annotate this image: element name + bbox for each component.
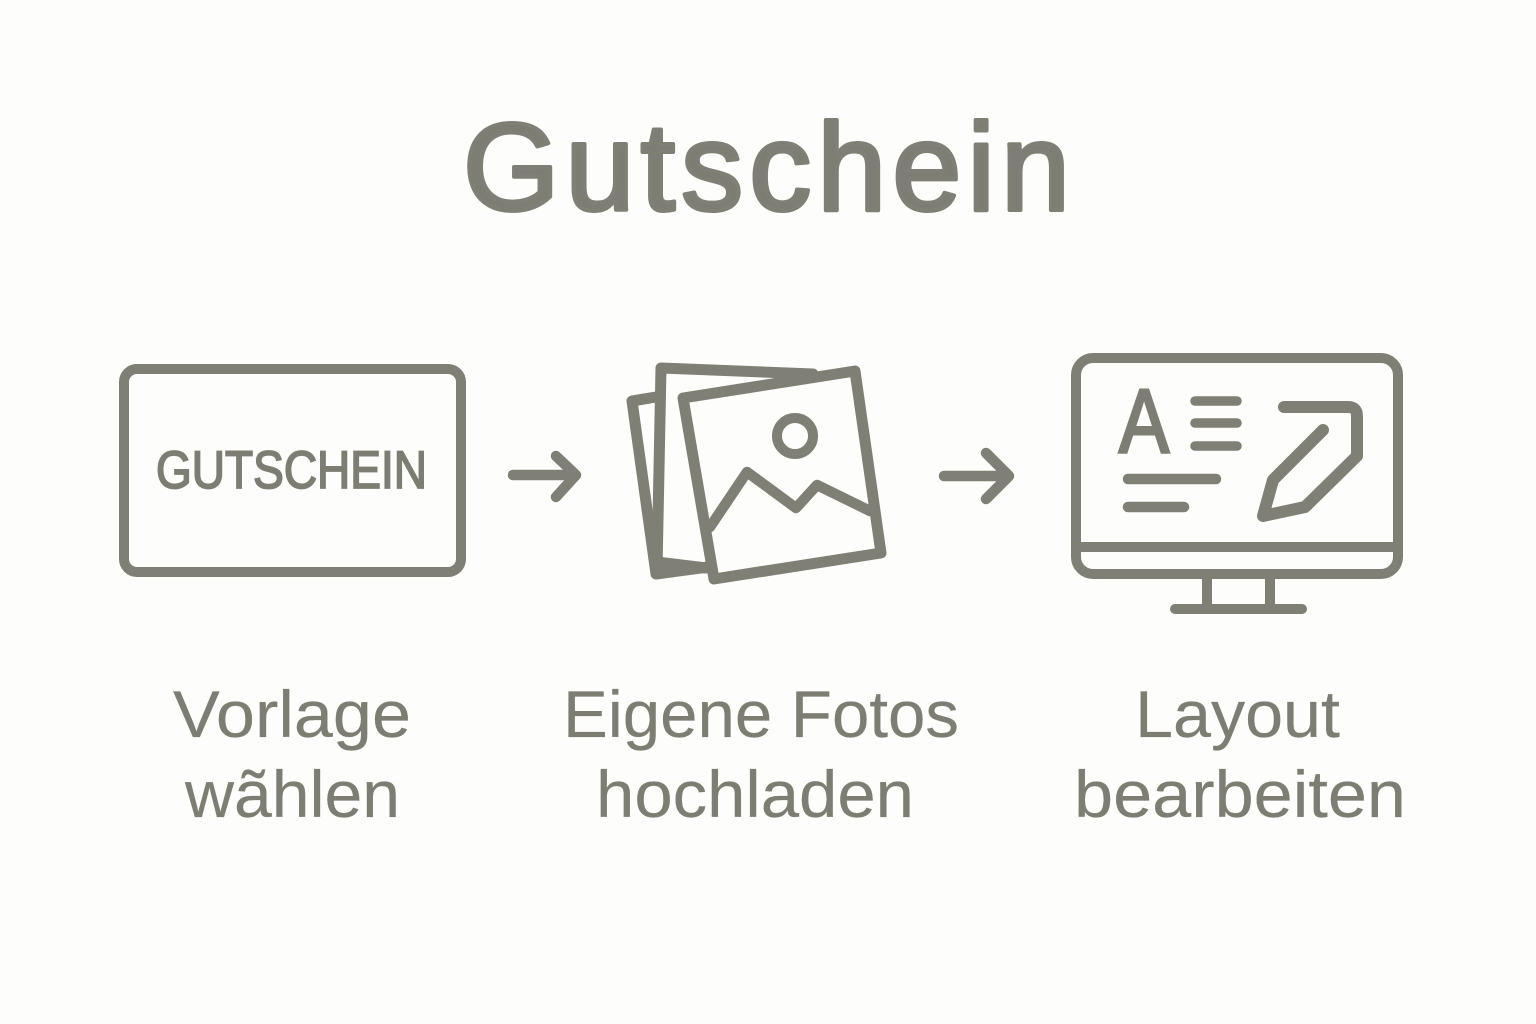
- arrow: step 2 to step 3: [944, 453, 1009, 499]
- monitor frame: [1076, 358, 1398, 574]
- label: step 2: hochladen: [596, 757, 914, 831]
- front photo: [683, 371, 881, 579]
- letter A: A: [1119, 372, 1169, 472]
- sun: [777, 418, 813, 454]
- pencil: [1263, 407, 1357, 516]
- icon: desktop monitor editor: [1076, 358, 1398, 609]
- arrow: step 1 to step 2: [513, 456, 576, 497]
- label: step 1: wãhlen: [184, 757, 400, 831]
- icon: stacked photos: [632, 368, 881, 579]
- title: Gutschein: [463, 99, 1070, 237]
- text lines: [1195, 401, 1237, 446]
- middle photo: [657, 368, 813, 570]
- label: step 3: Layout: [1135, 677, 1340, 751]
- label: step 3: bearbeiten: [1074, 757, 1406, 831]
- label: step 1: Vorlage: [173, 677, 411, 751]
- mountains: [710, 472, 870, 527]
- label: step 3: [1074, 677, 1406, 831]
- monitor stand: [1175, 579, 1302, 609]
- label: step 2: [563, 677, 959, 831]
- screen divider: [1076, 542, 1398, 552]
- label: step 2: Eigene Fotos: [563, 677, 959, 751]
- voucher card text: GUTSCHEIN: [156, 441, 427, 500]
- back photo: [632, 397, 708, 574]
- label: step 1: [173, 677, 411, 831]
- icon: voucher card: [124, 369, 461, 572]
